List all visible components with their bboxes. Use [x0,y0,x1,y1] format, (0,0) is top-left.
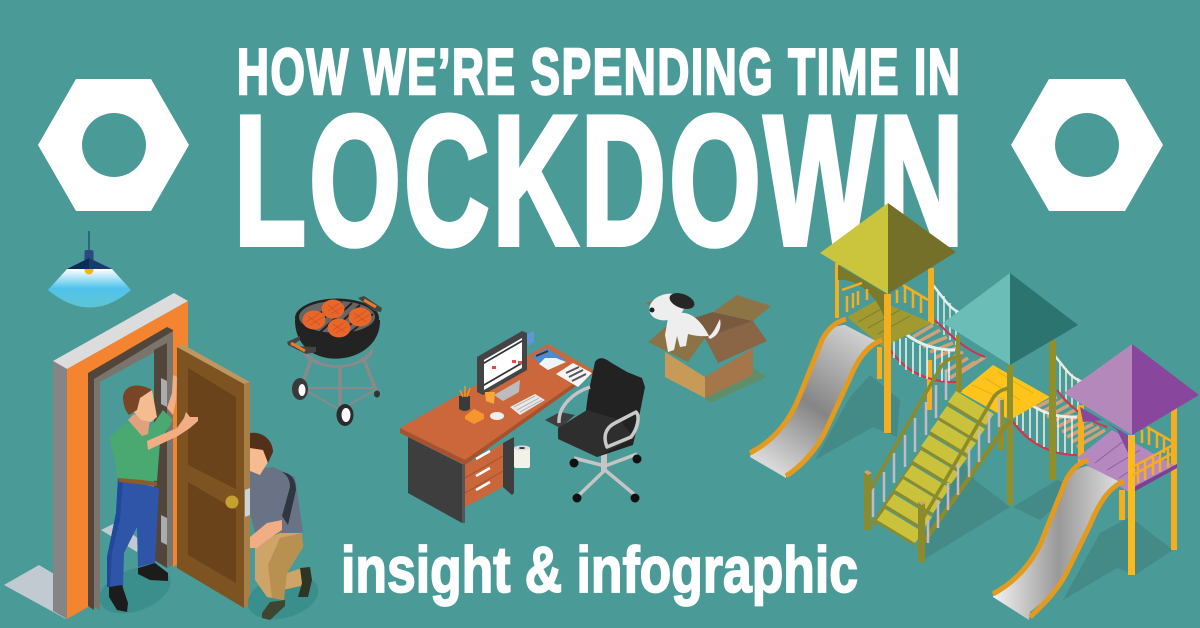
dog in a cardboard box [645,290,771,403]
door frame wall [53,293,188,619]
ground shadows [815,375,1173,600]
first slide [750,319,882,478]
yellow tower [820,203,956,433]
man kneeling [243,433,323,627]
man in green shirt [93,375,198,622]
door scene with two men [4,293,323,627]
desk pedestal [408,437,503,523]
dog [646,290,721,352]
office chair [558,358,645,502]
desk top [400,344,593,460]
teal tower [943,273,1078,505]
title line one: HOW WE’RE SPENDING TIME IN [237,35,960,108]
floor shadow patches [4,522,140,619]
second slide [993,460,1124,620]
desk items [459,348,592,424]
stairs [864,356,1010,562]
icon: right hexagon nut [1011,79,1163,211]
paper roll [514,446,530,468]
office desk and chair [400,331,645,523]
second bridge [1010,356,1107,455]
title line two: lockdown: LOCKDOWN [234,77,964,283]
back posts [877,347,932,410]
icon: ceiling lamp [48,231,131,308]
icon: barbecue grill [287,296,382,426]
icon: left hexagon nut [38,79,189,211]
first bridge [888,285,985,382]
playground [750,203,1199,620]
open door [177,344,250,608]
computer monitor [477,331,534,401]
purple tower [1064,344,1199,575]
subtitle: insight & infographic [341,533,858,606]
